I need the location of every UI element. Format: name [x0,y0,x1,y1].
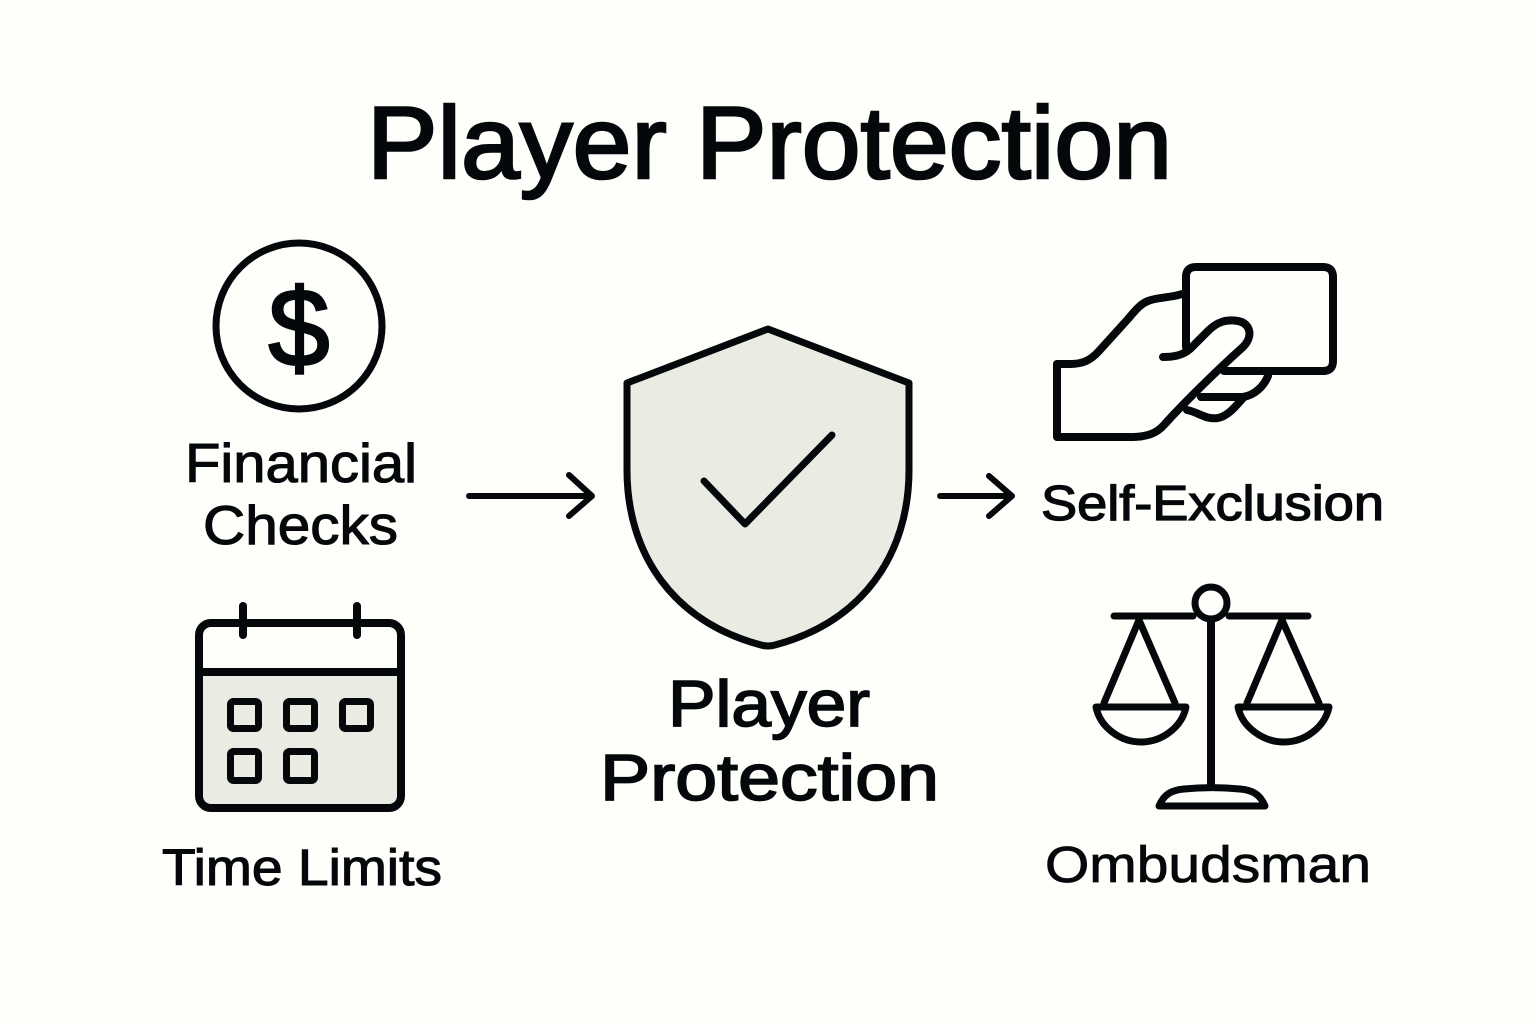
label: financial checks [185,432,417,556]
icon: hand holding card [1057,267,1333,437]
icon: dollar coin: $ [268,267,330,390]
label: player protection [600,667,939,814]
icon: shield with check [627,329,909,646]
label: self-exclusion: Self-Exclusion [1041,477,1384,531]
label: ombudsman: Ombudsman [1045,836,1371,893]
icon: dollar coin [216,243,382,409]
label: time limits: Time Limits [162,839,442,896]
icon: calendar [199,606,401,808]
label: player protection: Protection [600,741,939,814]
title: Player Protection [367,86,1172,200]
label: player protection: Player [668,667,870,740]
label: financial checks: Financial [185,432,417,494]
arrow: shield to self-exclusion [940,476,1012,516]
arrow: left to shield [469,475,592,516]
icon: scales of justice [1096,587,1329,806]
label: financial checks: Checks [203,494,398,556]
